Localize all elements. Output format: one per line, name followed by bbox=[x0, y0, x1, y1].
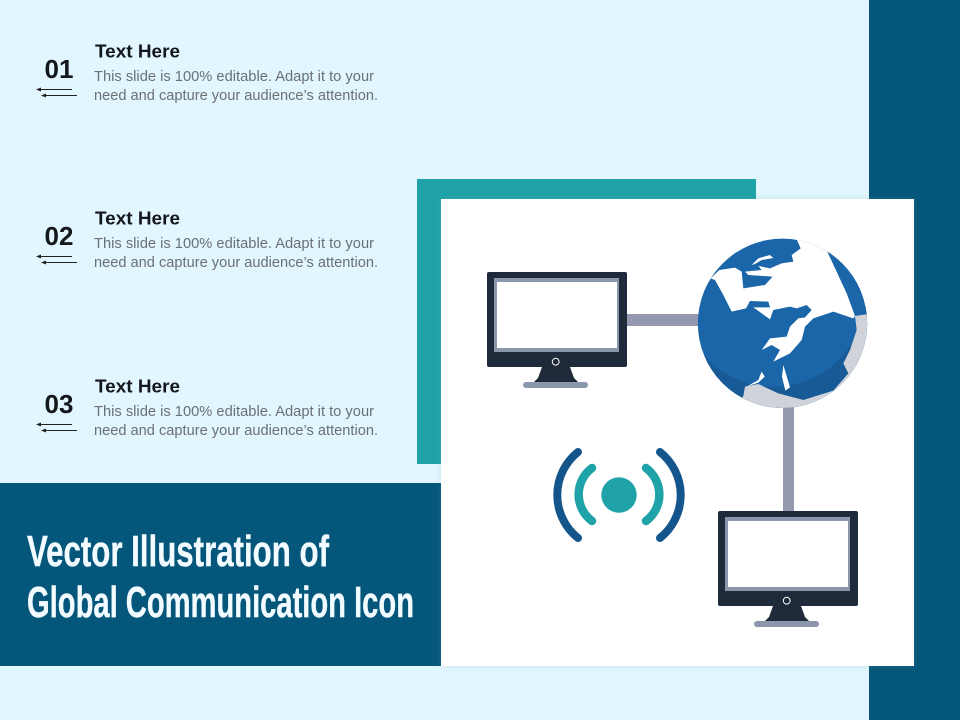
title bbox=[27, 527, 414, 627]
text block 03: Text Here bbox=[95, 376, 180, 396]
icon: globe bbox=[698, 238, 868, 408]
right band bbox=[869, 0, 960, 720]
connector: globe to lower monitor bbox=[783, 405, 794, 511]
text block 02: 02 bbox=[45, 221, 73, 251]
text block 01: 01 bbox=[45, 54, 73, 84]
title: Vector Illustration of bbox=[27, 527, 329, 576]
text block 02: Text Here bbox=[95, 208, 180, 228]
text block 03: need and capture your audience’s attention. bbox=[94, 422, 378, 439]
connector: monitor to globe bbox=[627, 314, 703, 326]
text block 02 bbox=[36, 208, 378, 271]
icon: monitor top bbox=[487, 272, 627, 388]
icon: monitor bottom bbox=[718, 511, 858, 627]
panel: illustration card bbox=[441, 199, 914, 666]
teal accent panel bbox=[417, 179, 756, 464]
title: Global Communication Icon bbox=[27, 578, 414, 627]
text block 03: 03 bbox=[45, 389, 73, 419]
text block 01: need and capture your audience’s attention. bbox=[94, 87, 378, 104]
text block 03: This slide is 100% editable. Adapt it to your bbox=[94, 403, 374, 420]
title bar bbox=[0, 483, 445, 666]
text block 01: Text Here bbox=[95, 40, 180, 62]
text block 02: This slide is 100% editable. Adapt it to your bbox=[94, 235, 374, 252]
text block 01 bbox=[36, 40, 378, 104]
text block 02: need and capture your audience’s attention. bbox=[94, 254, 378, 271]
icon: wireless signal bbox=[557, 452, 681, 538]
text block 03 bbox=[36, 376, 378, 439]
text block 01: This slide is 100% editable. Adapt it to your bbox=[94, 68, 374, 85]
